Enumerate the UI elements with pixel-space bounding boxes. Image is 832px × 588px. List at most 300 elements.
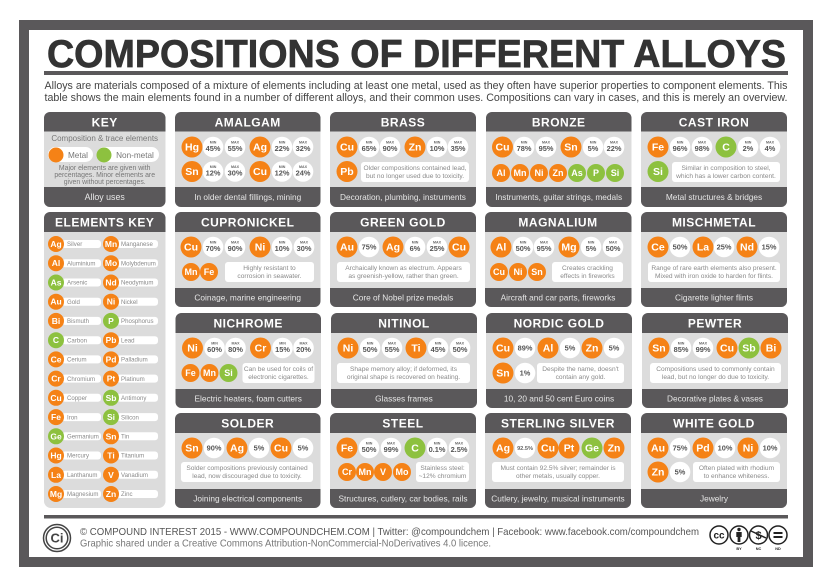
heading: bronze: BRONZE	[532, 116, 586, 130]
uses: bronze: Instruments, guitar strings, medals	[495, 192, 622, 202]
composition: bronze: Zn	[552, 168, 564, 178]
composition: amalgam: MAX	[231, 140, 240, 144]
elements list: left column: Bi	[52, 316, 60, 326]
note: green gold: as greenish-yellow, rather than green.	[348, 273, 459, 280]
note: mischmetal: Mixed with iron oxide to harden for flints.	[655, 273, 773, 280]
composition: amalgam	[182, 136, 313, 182]
composition: nichrome: 60%	[207, 345, 222, 354]
composition: nitinol: MIN	[367, 342, 374, 346]
elements list: right column: Antimony	[121, 395, 147, 402]
composition: amalgam: 12%	[275, 168, 290, 178]
composition: bronze	[492, 136, 624, 182]
icon: creative commons licence badges: cc	[713, 530, 725, 542]
composition: amalgam: MAX	[299, 140, 308, 144]
composition: steel: 50%	[362, 445, 377, 454]
composition: brass: 35%	[451, 144, 466, 153]
elements list: left column: Cr	[51, 374, 61, 384]
note: pewter: lead, but no longer do due to toxicity.	[662, 374, 769, 381]
composition: white gold: Pd	[696, 443, 710, 455]
composition: steel: C	[411, 443, 419, 455]
key: explanation: Major elements are given with	[59, 165, 151, 172]
composition: mischmetal: Ce	[651, 242, 665, 254]
heading: brass: BRASS	[381, 116, 425, 130]
note: cast iron	[672, 162, 780, 182]
elements list: right column: Ti	[107, 450, 115, 460]
uses: pewter: Decorative plates & vases	[667, 394, 763, 404]
composition: cupronickel: MAX	[231, 240, 240, 244]
elements list: left column: Cerium	[67, 357, 87, 364]
composition: nichrome: Mn	[203, 368, 216, 378]
heading: nitinol: NITINOL	[378, 316, 430, 330]
elements list: right column: Platinum	[121, 376, 145, 383]
introduction text: table shows the main elements found in a number of different alloys, and their common uses. Compositions can vary in cases, and this is merely an overview.	[44, 92, 788, 104]
composition: cupronickel: 30%	[297, 244, 312, 253]
composition: cupronickel: MIN	[210, 240, 217, 244]
composition: white gold: 10%	[763, 444, 778, 452]
panel: elements key	[44, 212, 166, 508]
composition: bronze: Mn	[514, 168, 526, 178]
composition: steel: MAX	[387, 442, 396, 446]
composition: pewter	[648, 338, 782, 358]
composition: bronze: 95%	[539, 144, 554, 153]
composition: green gold: Au	[340, 242, 354, 254]
note: brass: Older compositions contained lead,	[364, 165, 467, 172]
composition: solder: 5%	[254, 444, 265, 452]
panel: nitinol	[331, 313, 477, 408]
heading: white gold: WHITE GOLD	[673, 416, 755, 430]
composition: brass: 65%	[362, 144, 377, 153]
footer credits: Graphic shared under a Creative Commons Attribution-NonCommercial-NoDerivatives 4.0 licence.	[80, 538, 491, 550]
composition: magnalium: Al	[496, 242, 506, 254]
composition: nichrome: Cr	[255, 343, 266, 355]
elements list: right column: Sn	[106, 431, 116, 441]
composition: cupronickel: MAX	[300, 240, 309, 244]
composition: bronze: Sn	[564, 142, 578, 154]
composition: cupronickel: Ni	[255, 242, 265, 254]
elements list: right column: Zinc	[121, 491, 133, 498]
note: nichrome	[242, 363, 314, 383]
composition: cast iron	[648, 136, 780, 182]
note: nitinol	[337, 363, 470, 383]
uses: nitinol: Glasses frames	[375, 394, 433, 404]
icon: compound interest logo: Ci	[50, 530, 64, 546]
elements list: left column: Chromium	[67, 376, 95, 383]
note: solder: lead, now discouraged due to toxicity.	[192, 473, 302, 480]
composition: white gold: 5%	[675, 468, 686, 476]
composition: mischmetal: 25%	[717, 242, 732, 252]
heading: solder: SOLDER	[221, 416, 274, 430]
elements list: left column: Iron	[67, 414, 78, 421]
note: magnalium: Creates crackling	[562, 265, 613, 272]
note: magnalium	[552, 262, 623, 282]
composition: cast iron: 2%	[743, 144, 754, 153]
icon: creative commons licence badges: $	[755, 530, 762, 542]
composition: green gold: 25%	[430, 244, 445, 253]
heading: cupronickel: CUPRONICKEL	[201, 216, 294, 230]
composition: white gold	[648, 438, 780, 482]
composition: white gold: 10%	[718, 444, 733, 452]
elements list: left column: C	[53, 335, 59, 345]
composition: cast iron: MIN	[745, 140, 752, 144]
note: steel: ~12% chromium	[419, 473, 467, 480]
elements list: left column: Aluminium	[67, 260, 95, 267]
heading: sterling silver: STERLING SILVER	[501, 416, 615, 430]
composition: brass: MIN	[366, 140, 373, 144]
elements list: left column: Al	[52, 258, 60, 268]
composition: white gold: 75%	[673, 444, 688, 452]
composition: amalgam: 24%	[296, 168, 311, 178]
panel: solder	[175, 413, 320, 508]
composition: cast iron: 4%	[765, 144, 776, 153]
composition: mischmetal: 50%	[673, 242, 688, 252]
elements list: right column: Manganese	[121, 241, 153, 248]
composition: brass: Cu	[340, 142, 354, 154]
composition: bronze: 22%	[607, 144, 622, 153]
composition: bronze: 5%	[588, 144, 599, 153]
elements list: right column: Sb	[106, 393, 116, 403]
composition: pewter: Sb	[742, 343, 756, 355]
composition: brass	[336, 136, 468, 182]
composition: cast iron: Fe	[652, 142, 664, 154]
composition: nordic gold: Sn	[496, 368, 510, 380]
composition: nichrome: Si	[224, 368, 233, 378]
composition: magnalium: Sn	[531, 267, 543, 277]
composition: brass: MIN	[434, 140, 441, 144]
elements list: right column: Pd	[106, 354, 116, 364]
panel: magnalium	[485, 212, 632, 307]
composition: green gold: Ag	[386, 242, 400, 254]
composition: nitinol: MAX	[388, 342, 397, 346]
key: non-metal legend: Non-metal	[116, 151, 154, 160]
heading: cast iron: CAST IRON	[679, 116, 749, 130]
composition: bronze: MAX	[542, 140, 551, 144]
composition: amalgam: Sn	[185, 166, 199, 178]
composition: cupronickel: 10%	[275, 244, 290, 253]
composition: amalgam: MIN	[279, 165, 286, 169]
elements list: right column: Nd	[105, 278, 117, 288]
composition: sterling silver: Ge	[585, 443, 599, 455]
composition: bronze: MAX	[610, 140, 619, 144]
elements list: right column: Zn	[106, 489, 116, 499]
elements list: left column: Ge	[50, 431, 62, 441]
composition: nitinol: 55%	[385, 345, 400, 354]
heading: nichrome: NICHROME	[214, 316, 283, 330]
composition: nordic gold: 89%	[518, 344, 533, 352]
note: white gold: to enhance whiteness.	[704, 473, 769, 480]
composition: steel: MAX	[455, 442, 464, 446]
composition: mischmetal	[648, 236, 779, 258]
heading: elements key: ELEMENTS KEY	[55, 216, 154, 230]
composition: bronze: Si	[611, 168, 619, 178]
composition: magnalium: 50%	[516, 244, 531, 253]
composition: green gold: Cu	[452, 242, 466, 254]
composition: steel: Cr	[342, 467, 352, 477]
composition: nitinol: MAX	[456, 342, 465, 346]
key: composition caption: Composition & trace elements	[51, 134, 158, 143]
composition: sterling silver: Cu	[541, 443, 555, 455]
composition: brass: Zn	[409, 142, 421, 154]
icon: creative commons licence badges: NC	[756, 547, 761, 551]
note: magnalium: effects in fireworks	[560, 273, 615, 280]
uses: steel: Structures, cutlery, car bodies, rails	[339, 494, 467, 504]
composition: nordic gold	[492, 338, 624, 384]
composition: sterling silver: Ag	[496, 443, 510, 455]
note: steel: Stainless steel:	[420, 465, 465, 472]
heading: green gold: GREEN GOLD	[360, 216, 446, 230]
composition: solder: Cu	[274, 443, 288, 455]
note: nichrome: electronic cigarettes.	[248, 374, 309, 381]
elements list: left column: Magnesium	[67, 491, 98, 498]
composition: magnalium: MIN	[588, 240, 595, 244]
composition: nitinol: Ti	[411, 343, 421, 355]
elements list: right column: Neodymium	[121, 280, 154, 287]
panel: mischmetal	[641, 212, 787, 307]
composition: white gold: Ni	[743, 443, 753, 455]
composition: sterling silver: Zn	[608, 443, 620, 455]
note: solder: Solder compositions previously contained	[186, 465, 308, 472]
composition: white gold: Zn	[652, 467, 664, 479]
uses: amalgam: In older dental fillings, mining	[194, 192, 302, 202]
composition: magnalium: 95%	[537, 244, 552, 253]
composition: magnalium: Mg	[561, 242, 577, 254]
composition: nichrome	[182, 338, 314, 382]
uses: nichrome: Electric heaters, foam cutters	[194, 394, 302, 404]
composition: solder	[182, 438, 313, 458]
composition: cast iron: MAX	[766, 140, 775, 144]
composition: steel: Mo	[396, 467, 409, 477]
note: nitinol: original shape is recovered on heating.	[347, 374, 460, 381]
note: cupronickel: Highly resistant to	[243, 265, 296, 272]
composition: solder: 5%	[298, 444, 309, 452]
elements list: left column: Au	[50, 297, 62, 307]
composition: nichrome: MIN	[211, 342, 218, 346]
note: green gold	[337, 262, 470, 282]
panel: bronze	[486, 112, 632, 207]
composition: mischmetal: Nd	[740, 242, 754, 254]
note: pewter: Compositions used to commonly contain	[656, 366, 775, 373]
composition: bronze: Cu	[496, 142, 510, 154]
note: white gold: Often plated with rhodium	[699, 465, 775, 472]
uses: white gold: Jewelry	[700, 494, 729, 504]
introduction text	[44, 80, 788, 104]
composition: amalgam: 30%	[228, 168, 243, 178]
composition: nitinol: 45%	[431, 345, 446, 354]
elements list: left column: Ag	[50, 239, 62, 249]
heading: key: KEY	[92, 116, 118, 130]
panel: nichrome	[176, 313, 321, 408]
heading: nordic gold: NORDIC GOLD	[514, 316, 604, 330]
composition: mischmetal: 15%	[762, 242, 777, 252]
note: green gold: Archaically known as electrum. Appears	[345, 265, 462, 272]
elements list: left column: Hg	[50, 450, 62, 460]
composition: nichrome: 20%	[296, 345, 311, 354]
key: alloy uses: Alloy uses	[85, 192, 125, 202]
composition: sterling silver	[492, 438, 624, 458]
composition: pewter: 85%	[674, 345, 689, 354]
elements list: right column: Si	[107, 412, 115, 422]
panel: sterling silver	[485, 413, 631, 508]
icon: compound interest logo	[44, 524, 70, 552]
composition: green gold: 75%	[362, 242, 377, 252]
note: cast iron: which has a lower carbon content.	[675, 173, 776, 180]
uses: cast iron: Metal structures & bridges	[666, 192, 762, 202]
composition: cupronickel: Mn	[184, 267, 198, 277]
composition: amalgam: 45%	[206, 144, 221, 153]
composition: green gold: 6%	[410, 244, 421, 253]
elements list: left column: Mercury	[67, 453, 90, 460]
composition: mischmetal: La	[697, 242, 709, 254]
elements list: right column: Lead	[121, 337, 135, 344]
composition: cast iron: Si	[653, 166, 663, 178]
key: explanation	[54, 165, 155, 186]
composition: brass: 90%	[383, 144, 398, 153]
elements list: left column: Lanthanum	[67, 472, 98, 479]
elements list: right column: Mo	[105, 258, 117, 268]
composition: brass: MAX	[454, 140, 463, 144]
elements list: left column: Cu	[50, 393, 62, 403]
composition: bronze: Al	[496, 168, 506, 178]
elements list: right column: P	[108, 316, 114, 326]
composition: nordic gold: 1%	[520, 368, 531, 378]
icon: creative commons licence badges	[710, 526, 787, 551]
elements list: left column: Copper	[67, 395, 87, 402]
composition: cast iron: MAX	[698, 140, 707, 144]
composition: solder: 90%	[207, 444, 222, 452]
composition: cast iron: 98%	[695, 144, 710, 153]
elements list: right column: Tin	[121, 434, 129, 440]
composition: magnalium: 5%	[586, 244, 597, 253]
elements list: right column: Ni	[107, 297, 115, 307]
note: sterling silver: Must contain 92.5% silver; remainder is	[500, 465, 616, 472]
composition: cast iron: C	[722, 142, 730, 154]
elements list: right column: Molybdenum	[121, 260, 156, 267]
elements list: left column: Carbon	[67, 337, 87, 344]
composition: steel: MIN	[434, 442, 441, 446]
composition: cupronickel: Fe	[204, 267, 214, 277]
note: nordic gold: contain any gold.	[556, 374, 606, 381]
uses: mischmetal: Cigarette lighter flints	[675, 292, 753, 302]
panel: cast iron	[641, 112, 787, 207]
composition: amalgam: 32%	[296, 144, 311, 153]
key: explanation: given without percentages.	[64, 179, 146, 186]
uses: green gold: Core of Nobel prize medals	[353, 292, 453, 302]
composition: pewter: MAX	[699, 342, 708, 346]
composition: bronze: Ni	[534, 168, 544, 178]
elements list: left column: Germanium	[67, 434, 99, 440]
note: brass: but no longer used due to toxicity.	[366, 173, 464, 180]
panel: nordic gold	[486, 313, 632, 408]
elements list: right column: Pb	[106, 335, 116, 345]
composition: amalgam: Ag	[253, 142, 267, 154]
footer credits	[80, 527, 699, 550]
composition: amalgam: MIN	[210, 165, 217, 169]
composition: nordic gold: Cu	[496, 343, 510, 355]
composition: nordic gold: Zn	[586, 343, 598, 355]
composition: green gold: MIN	[412, 240, 419, 244]
panel: amalgam	[175, 112, 320, 207]
panel: pewter	[642, 313, 788, 408]
panel: white gold	[641, 413, 787, 508]
elements list: right column: Pt	[107, 374, 115, 384]
note: cupronickel: corrosion in seawater.	[237, 273, 302, 280]
note: sterling silver: other metals, usually copper.	[516, 473, 600, 480]
elements list: right column: Mn	[105, 239, 117, 249]
composition: nichrome: MAX	[232, 342, 240, 346]
composition: white gold: Au	[651, 443, 665, 455]
note: solder	[181, 462, 313, 482]
composition: amalgam: 12%	[206, 168, 221, 178]
composition: magnalium: 50%	[606, 244, 621, 253]
composition: nitinol: Ni	[343, 343, 353, 355]
note: nordic gold: Despite the name, doesn't	[542, 366, 619, 373]
panel: green gold	[330, 212, 476, 307]
elements list: left column: Bismuth	[67, 318, 89, 325]
composition: steel: Fe	[341, 443, 353, 455]
elements list: right column: Nickel	[121, 299, 138, 306]
composition: brass: Pb	[340, 166, 354, 178]
composition: cast iron: MIN	[677, 140, 684, 144]
composition: magnalium	[490, 236, 623, 281]
composition: nichrome: Fe	[185, 368, 196, 378]
composition: nordic gold: 5%	[609, 344, 620, 352]
composition: steel: 2.5%	[451, 445, 468, 454]
panel: key	[44, 112, 166, 207]
composition: steel: 99%	[384, 445, 399, 454]
elements list: right column: V	[108, 470, 114, 480]
composition: magnalium: Cu	[493, 267, 505, 277]
elements list: right column: Titanium	[121, 453, 144, 460]
panel: brass	[330, 112, 476, 207]
composition: amalgam: 22%	[275, 144, 290, 153]
note: pewter	[650, 363, 781, 383]
composition: nichrome: 15%	[275, 345, 290, 354]
elements list: right column: Silicon	[121, 414, 139, 421]
footer credits: © COMPOUND INTEREST 2015 - WWW.COMPOUNDCHEM.COM | Twitter: @compoundchem | Facebook: www.facebook.com/compoundchem	[80, 527, 699, 538]
composition: nichrome: MIN	[279, 342, 286, 346]
composition: pewter: 99%	[696, 345, 711, 354]
composition: magnalium: Ni	[514, 267, 522, 277]
title: COMPOSITIONS OF DIFFERENT ALLOYS	[47, 33, 786, 76]
composition: sterling silver: Pt	[564, 443, 575, 455]
composition: nitinol	[338, 338, 470, 358]
heading: mischmetal: MISCHMETAL	[672, 216, 756, 230]
composition: steel: V	[380, 467, 386, 477]
introduction text: Alloys are materials composed of a mixture of elements including at least one metal, used as they often have superior properties to component elements. This	[44, 80, 788, 92]
elements list: right column: Phosphorus	[121, 318, 154, 325]
composition: amalgam: Hg	[185, 142, 199, 154]
key: metal legend: Metal	[68, 151, 88, 160]
uses: solder: Joining electrical components	[193, 494, 302, 504]
elements list: left column: Mg	[50, 489, 62, 499]
composition: nichrome: Ni	[187, 343, 198, 355]
composition: amalgam: 55%	[228, 144, 243, 153]
icon: creative commons licence badges: ND	[775, 547, 781, 551]
composition: nichrome: 80%	[228, 345, 243, 354]
uses: magnalium: Aircraft and car parts, fireworks	[501, 292, 615, 302]
note: cast iron: Similar in composition to steel,	[681, 165, 771, 172]
note: brass	[361, 162, 469, 182]
note: nitinol: Shape memory alloy; if deformed, its	[350, 366, 458, 373]
elements list: left column: Arsenic	[67, 280, 87, 287]
uses: brass: Decoration, plumbing, instruments	[340, 192, 466, 202]
note: mischmetal	[648, 262, 780, 282]
composition: nichrome: MAX	[300, 342, 308, 346]
composition: brass: MAX	[386, 140, 395, 144]
heading: steel: STEEL	[382, 416, 424, 430]
elements list: right column: Vanadium	[121, 472, 148, 479]
composition: brass: 10%	[430, 144, 445, 153]
composition: bronze: 78%	[517, 144, 532, 153]
